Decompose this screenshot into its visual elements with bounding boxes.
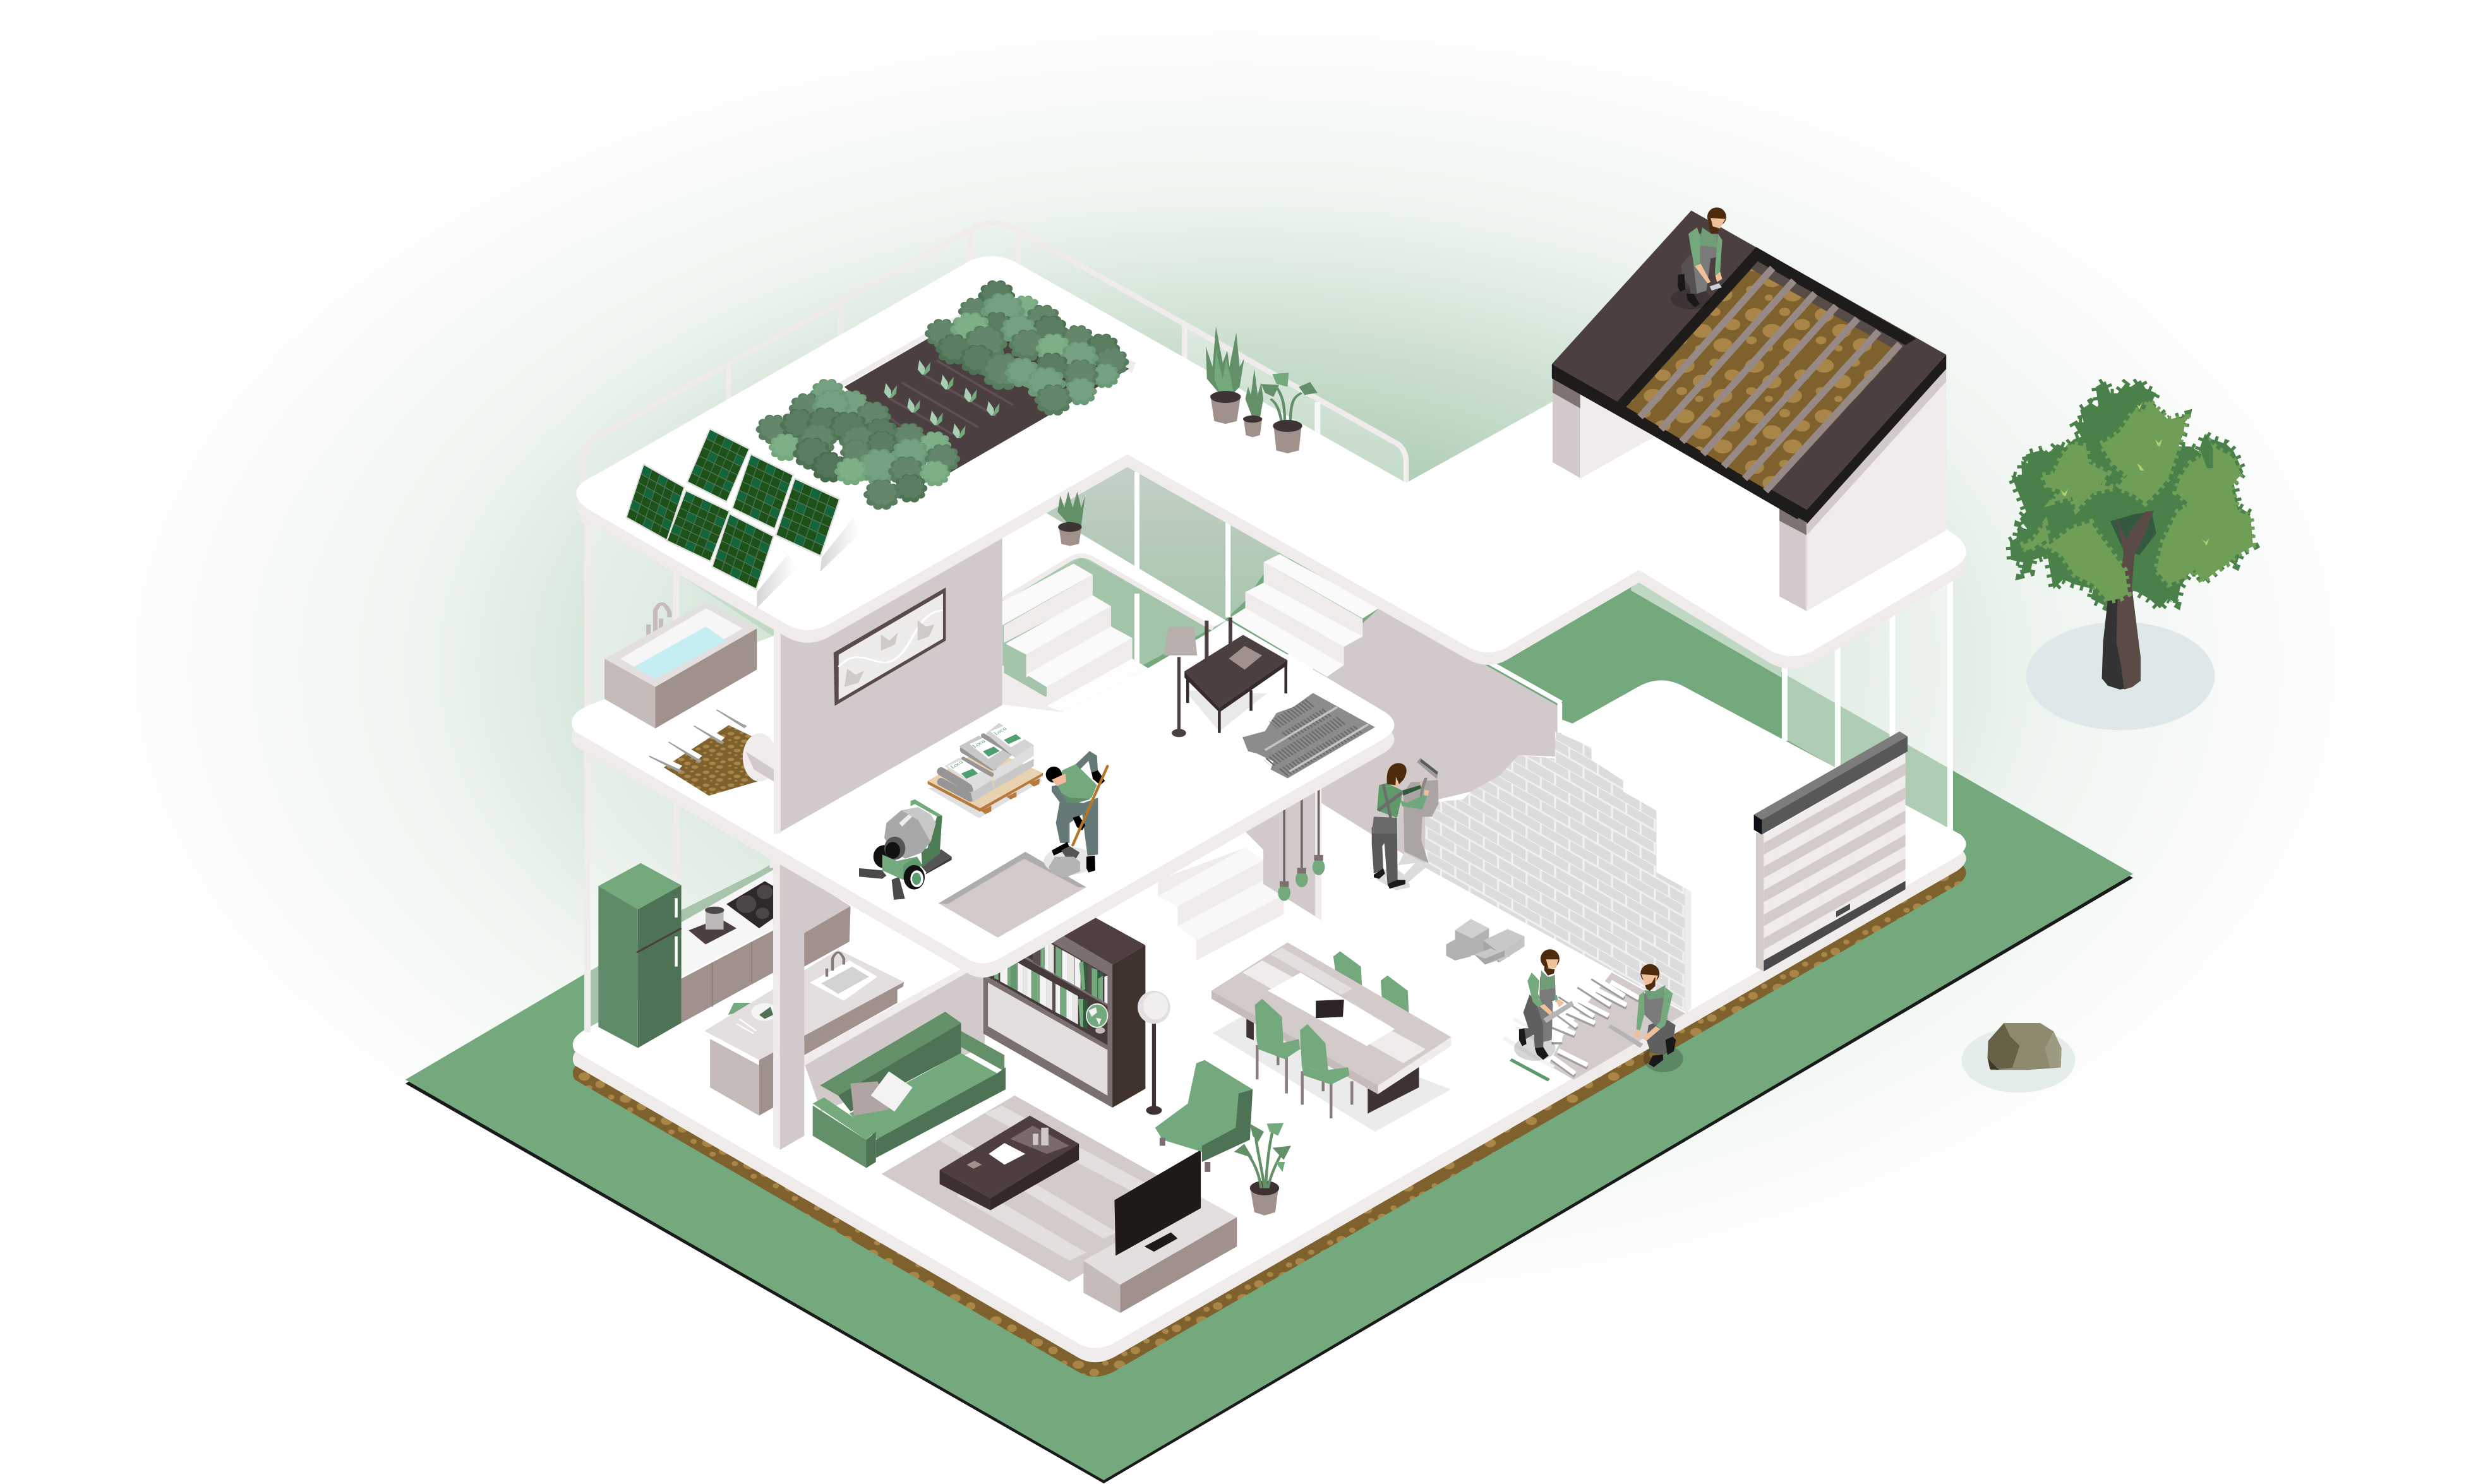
cement bags on pallet: Loca xyxy=(948,760,965,770)
kitchen island with sink xyxy=(704,950,904,1116)
glass behind the stair void xyxy=(1002,462,1280,697)
void plant xyxy=(1057,491,1085,546)
cement bags on pallet: Loca xyxy=(970,739,987,749)
brick wall xyxy=(1425,731,1691,1013)
garden bushes right xyxy=(925,280,1129,416)
cement bags on pallet xyxy=(928,723,1043,818)
grey wall with picture xyxy=(774,538,1002,834)
lower stairs xyxy=(1158,847,1284,960)
gable roof with exposed soil and rafters xyxy=(1552,210,1946,524)
worker painting the wall xyxy=(1372,758,1438,890)
gable roof walls xyxy=(1553,368,1946,611)
partition wall with hanging lamps xyxy=(1246,786,1325,920)
worker on the roof xyxy=(1671,207,1726,309)
sofa xyxy=(813,1012,1006,1168)
tree with shadow xyxy=(2010,380,2254,730)
cement mixer xyxy=(859,799,952,900)
right glazing and posts xyxy=(1631,573,1951,834)
floor hatch xyxy=(939,852,1086,938)
left glazing and posts xyxy=(587,515,781,1032)
garage roller door xyxy=(1754,731,1908,971)
floor lamp xyxy=(1138,991,1170,1115)
worker laying tiles right xyxy=(1608,964,1683,1072)
worker laying tiles left xyxy=(1514,949,1574,1061)
garden rows and seedlings xyxy=(884,360,1012,438)
rock with shadow xyxy=(1962,1023,2075,1092)
rooftop garden bed xyxy=(779,304,1136,474)
left staircase xyxy=(1002,563,1148,712)
ground floor slab with soil edge xyxy=(573,633,1966,1377)
bathroom floor tiles and toilet xyxy=(650,707,776,796)
spirit level xyxy=(1510,1058,1550,1082)
fridge xyxy=(598,863,682,1048)
roof terrace railing xyxy=(583,223,1406,522)
cement bags on pallet: Loca xyxy=(992,726,1009,736)
ground floor partition wall xyxy=(773,858,985,1150)
mid floor slab xyxy=(572,538,1394,978)
plaster back wall xyxy=(1283,608,1561,868)
tv stand and tv xyxy=(1083,1150,1237,1313)
armchair xyxy=(1155,1060,1253,1172)
terrace potted plants xyxy=(1206,326,1318,453)
solar panel array xyxy=(625,428,860,608)
desk with chairs and lamp xyxy=(1164,618,1287,737)
kitchen counter and hob xyxy=(682,868,773,1023)
garden bushes left xyxy=(756,379,960,510)
right staircase xyxy=(1229,554,1380,677)
floor plant xyxy=(1234,1123,1291,1216)
coffee table xyxy=(940,1116,1079,1210)
rug xyxy=(882,1096,1202,1282)
bookcase xyxy=(983,917,1145,1108)
bathtub xyxy=(604,602,757,728)
level three roof terrace slab xyxy=(576,256,1966,669)
stacked tile pallet xyxy=(1235,693,1375,779)
tile floor with bricklaying xyxy=(1503,972,1685,1080)
concrete blocks xyxy=(1446,919,1525,964)
dining set xyxy=(1211,942,1451,1132)
ground lawn plane xyxy=(406,474,2133,1483)
worker with shovel xyxy=(1044,751,1107,878)
